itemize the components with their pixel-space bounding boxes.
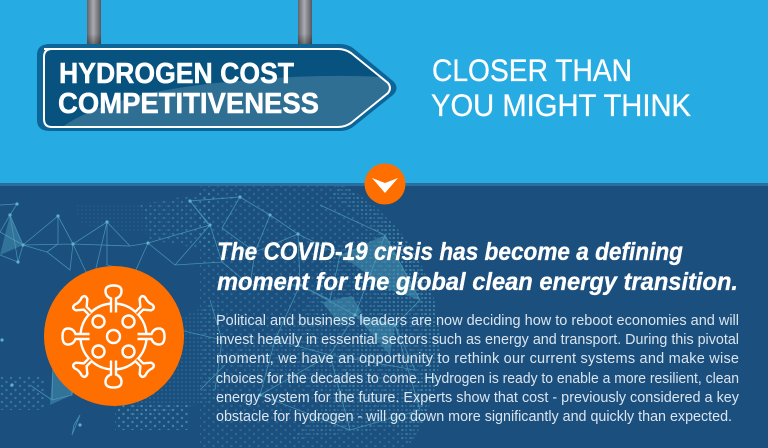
subtitle: CLOSER THAN [432,52,632,88]
signpost poles [87,0,312,45]
heading: The COVID-19 crisis has become a defining [217,238,683,266]
subtitle [431,52,691,123]
chevron down button [364,164,406,204]
sky-blue header background [0,0,768,184]
body paragraph: energy system for the future. Experts show that cost - previously considered a key [216,390,740,406]
icon: coronavirus in orange circle [44,266,184,406]
body paragraph: invest heavily in essential sectors such as energy and transport. During this pivotal [216,332,739,348]
network globe background [0,186,460,448]
title text [58,58,319,120]
heading: moment for the global clean energy transition. [217,268,738,296]
title text: HYDROGEN COST [59,58,294,90]
body paragraph: moment, we have an opportunity to rethink our current systems and make wise [216,351,739,367]
title text: COMPETITIVENESS [58,88,319,120]
arrow sign with title [37,44,396,131]
body paragraph: Political and business leaders are now deciding how to reboot economies and will [216,313,739,329]
body paragraph: choices for the decades to come. Hydrogen is ready to enable a more resilient, clean [216,371,739,387]
heading [217,238,738,296]
body paragraph [216,313,740,425]
navy lower panel background [0,183,768,448]
subtitle: YOU MIGHT THINK [431,87,691,123]
body paragraph: obstacle for hydrogen - will go down more significantly and quickly than expected. [216,409,732,425]
